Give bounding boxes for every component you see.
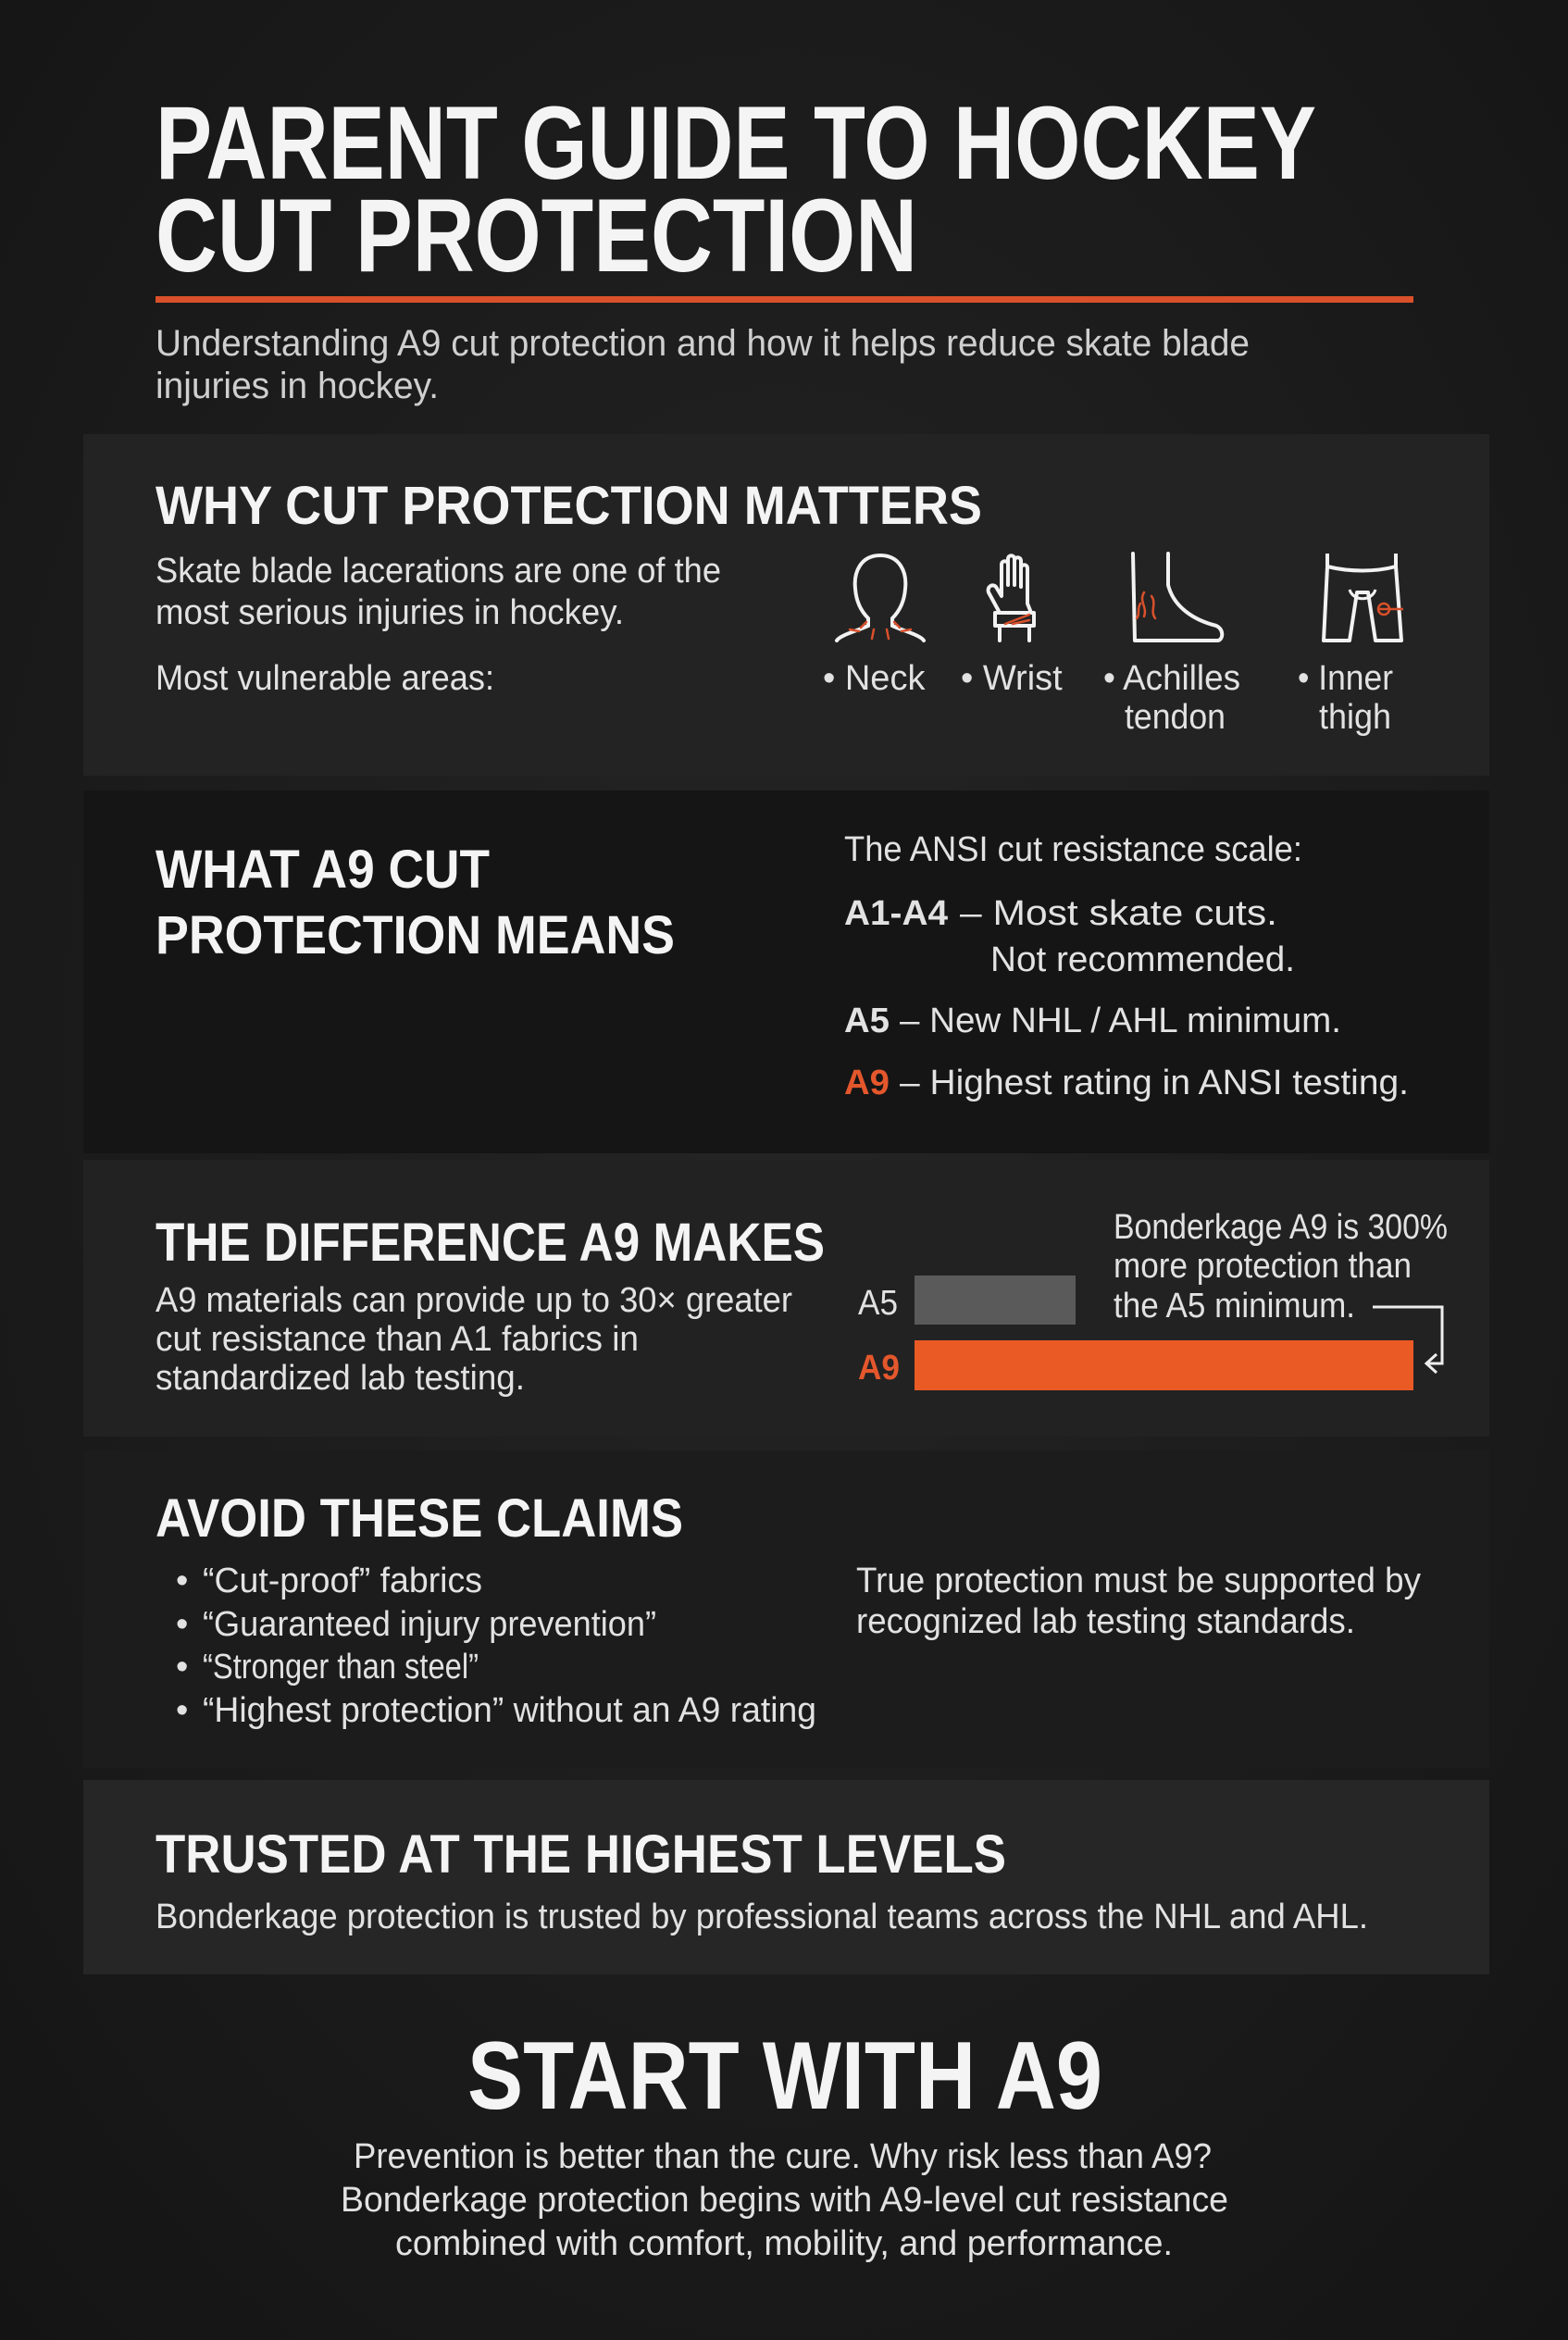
icon: inner thigh bbox=[1324, 554, 1403, 641]
ANSI scale list: The ANSI cut resistance scale: bbox=[844, 830, 1302, 869]
claims list: “Stronger than steel” bbox=[203, 1648, 479, 1687]
closing text: Prevention is better than the cure. Why risk less than A9? bbox=[354, 2137, 1212, 2176]
heading: what A9: PROTECTION MEANS bbox=[156, 905, 675, 965]
labels: vulnerable areas: tendon bbox=[1125, 698, 1226, 737]
icon: neck bbox=[837, 555, 924, 641]
text: trusted: Bonderkage protection is trusted by professional teams across the NHL and AHL. bbox=[156, 1898, 1368, 1936]
ANSI scale list: – Most skate cuts. bbox=[960, 894, 1277, 933]
labels: vulnerable areas: • Wrist bbox=[961, 659, 1063, 698]
labels: vulnerable areas: • Achilles bbox=[1103, 659, 1240, 698]
callout: 300%: more protection than bbox=[1114, 1247, 1412, 1286]
heading: trusted: TRUSTED AT THE HIGHEST LEVELS bbox=[156, 1824, 1006, 1885]
heading: difference: THE DIFFERENCE A9 MAKES bbox=[156, 1213, 825, 1273]
panel: difference A9 makes bbox=[83, 1160, 1489, 1437]
closing text: combined with comfort, mobility, and performance. bbox=[395, 2224, 1173, 2263]
subtitle: Understanding A9 cut protection and how it helps reduce skate blade bbox=[156, 323, 1250, 364]
bar chart: A5 bbox=[858, 1284, 898, 1323]
closing text: Bonderkage protection begins with A9-level cut resistance bbox=[341, 2181, 1228, 2220]
labels: vulnerable areas: • Inner bbox=[1298, 659, 1393, 698]
text: lacerations: Skate blade lacerations are one of the bbox=[156, 552, 721, 591]
text: lacerations bbox=[156, 552, 721, 698]
ANSI scale list: A5 bbox=[844, 1002, 890, 1040]
text: 30x: A9 materials can provide up to 30× greater bbox=[156, 1281, 792, 1320]
panel: avoid these claims bbox=[83, 1450, 1489, 1768]
title: CUT PROTECTION bbox=[156, 178, 917, 293]
claims list: • bbox=[176, 1605, 188, 1644]
claims list bbox=[176, 1562, 816, 1730]
claims list: • bbox=[176, 1562, 188, 1600]
claims list: “Highest protection” without an A9 rating bbox=[203, 1691, 816, 1730]
callout: 300%: Bonderkage A9 is 300% bbox=[1114, 1208, 1448, 1247]
panel: why cut protection matters bbox=[83, 434, 1489, 776]
labels: vulnerable areas: • Neck bbox=[823, 659, 926, 698]
ANSI scale list: – Highest rating in ANSI testing. bbox=[900, 1064, 1409, 1102]
heading: start with A9: START WITH A9 bbox=[467, 2023, 1102, 2130]
ANSI scale list: Not recommended. bbox=[990, 940, 1295, 979]
callout: 300%: the A5 minimum. bbox=[1114, 1287, 1355, 1326]
text: true protection bbox=[856, 1562, 1421, 1641]
claims list: • bbox=[176, 1648, 188, 1687]
heading: avoid: AVOID THESE CLAIMS bbox=[156, 1488, 683, 1549]
closing text bbox=[341, 2137, 1228, 2263]
claims list: “Guaranteed injury prevention” bbox=[203, 1605, 656, 1644]
title bbox=[156, 85, 1316, 293]
heading: what A9 bbox=[156, 840, 675, 965]
text: 30x bbox=[156, 1281, 792, 1398]
claims list: “Cut-proof” fabrics bbox=[203, 1562, 482, 1600]
ANSI scale list: A9 bbox=[844, 1064, 890, 1102]
title: PARENT GUIDE TO HOCKEY bbox=[156, 85, 1316, 201]
icon: achilles bbox=[1133, 554, 1222, 641]
text: 30x: cut resistance than A1 fabrics in bbox=[156, 1320, 639, 1359]
arrow bbox=[1373, 1307, 1442, 1373]
bar chart: A9 bbox=[858, 1349, 900, 1388]
orange rule bbox=[156, 296, 1413, 303]
text: true protection: recognized lab testing standards. bbox=[856, 1602, 1355, 1641]
text: lacerations: most serious injuries in hockey. bbox=[156, 593, 624, 632]
text: lacerations: Most vulnerable areas: bbox=[156, 659, 494, 698]
subtitle bbox=[156, 323, 1250, 406]
panel: what A9 means bbox=[83, 790, 1489, 1153]
heading: what A9: WHAT A9 CUT bbox=[156, 840, 490, 900]
subtitle: injuries in hockey. bbox=[156, 366, 439, 406]
labels: vulnerable areas bbox=[823, 659, 1393, 737]
panel: trusted bbox=[83, 1780, 1489, 1974]
text: true protection: True protection must be supported by bbox=[856, 1562, 1421, 1600]
heading: why: WHY CUT PROTECTION MATTERS bbox=[156, 476, 982, 536]
text: 30x: standardized lab testing. bbox=[156, 1359, 525, 1398]
bar chart bbox=[858, 1276, 1413, 1390]
ANSI scale list bbox=[844, 830, 1409, 1102]
callout: 300% bbox=[1114, 1208, 1448, 1326]
labels: vulnerable areas: thigh bbox=[1319, 698, 1391, 737]
ANSI scale list: A1-A4 bbox=[844, 894, 948, 933]
icon: wrist bbox=[989, 555, 1034, 641]
ANSI scale list: – New NHL / AHL minimum. bbox=[900, 1002, 1341, 1040]
claims list: • bbox=[176, 1691, 188, 1730]
